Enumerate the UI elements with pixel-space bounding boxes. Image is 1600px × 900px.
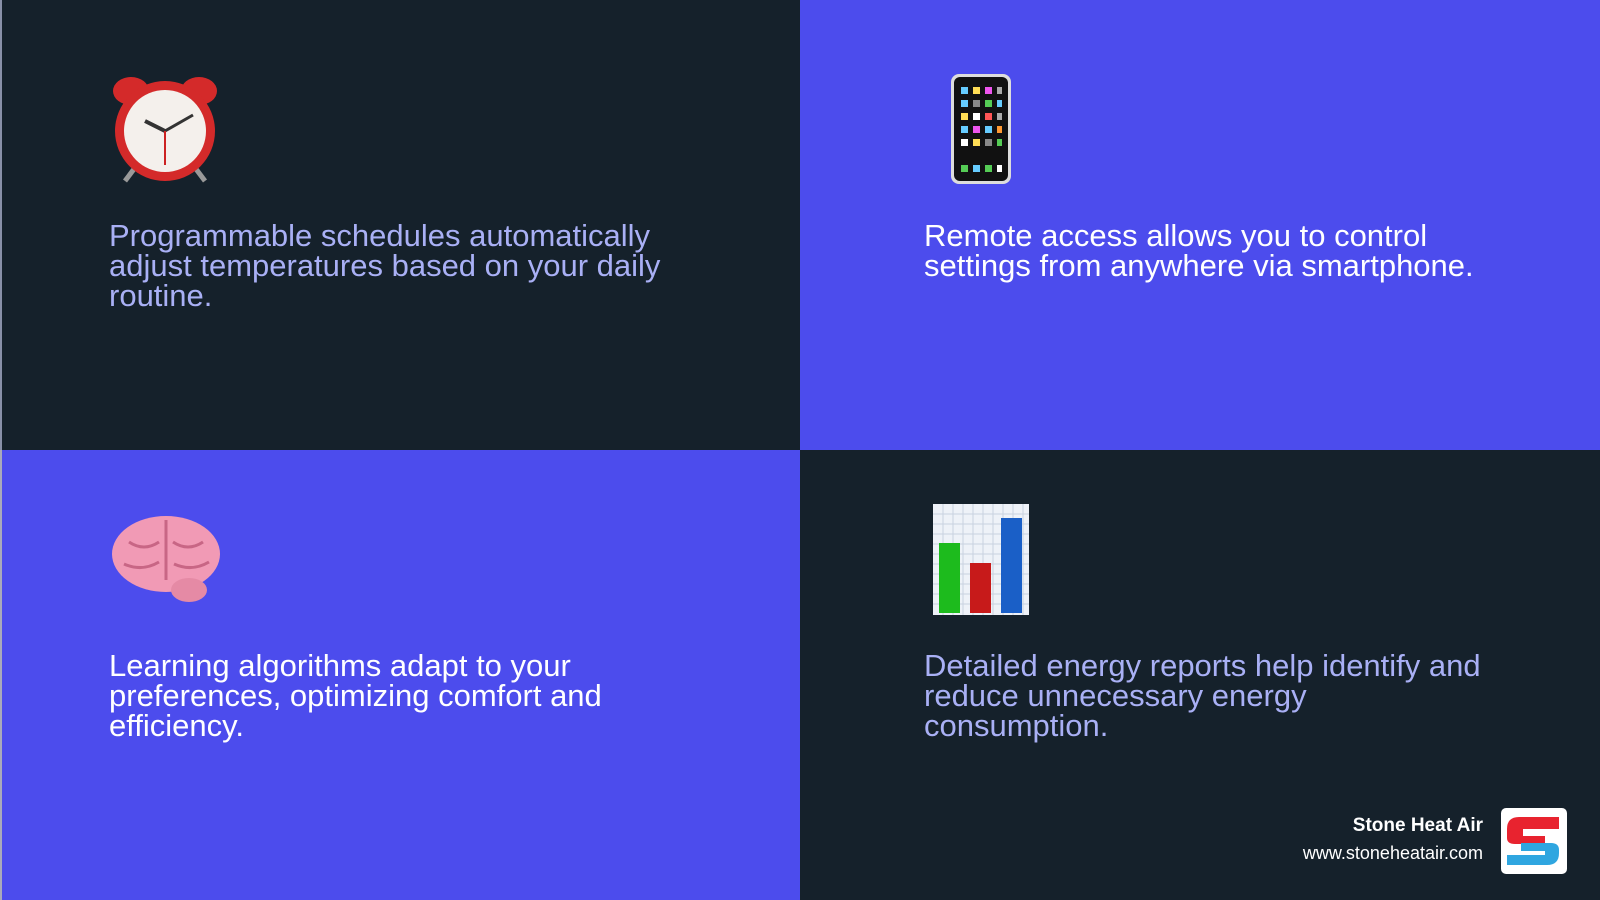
brand name: Stone Heat Air xyxy=(1353,815,1483,836)
text: remote access: Remote access allows you to control settings from anywhere via smartphone. xyxy=(924,218,1474,283)
text: energy reports: Detailed energy reports help identify and reduce unnecessary energy consumption. xyxy=(924,648,1481,743)
panel: learning algorithms xyxy=(0,450,800,900)
icon: brain xyxy=(112,516,220,602)
brand block xyxy=(1302,808,1567,874)
logo xyxy=(1501,808,1567,874)
brand url: www.stoneheatair.com xyxy=(1303,843,1483,863)
icon: smartphone xyxy=(951,74,1011,184)
text: learning: Learning algorithms adapt to your preferences, optimizing comfort and efficiency. xyxy=(109,648,602,743)
icon: alarm clock xyxy=(113,77,217,182)
icon: bar chart xyxy=(933,504,1029,615)
panel: energy reports xyxy=(800,450,1600,900)
panel: remote access xyxy=(800,0,1600,450)
panel: programmable schedules xyxy=(0,0,800,450)
text: schedules: Programmable schedules automatically adjust temperatures based on your daily routine. xyxy=(109,218,660,313)
